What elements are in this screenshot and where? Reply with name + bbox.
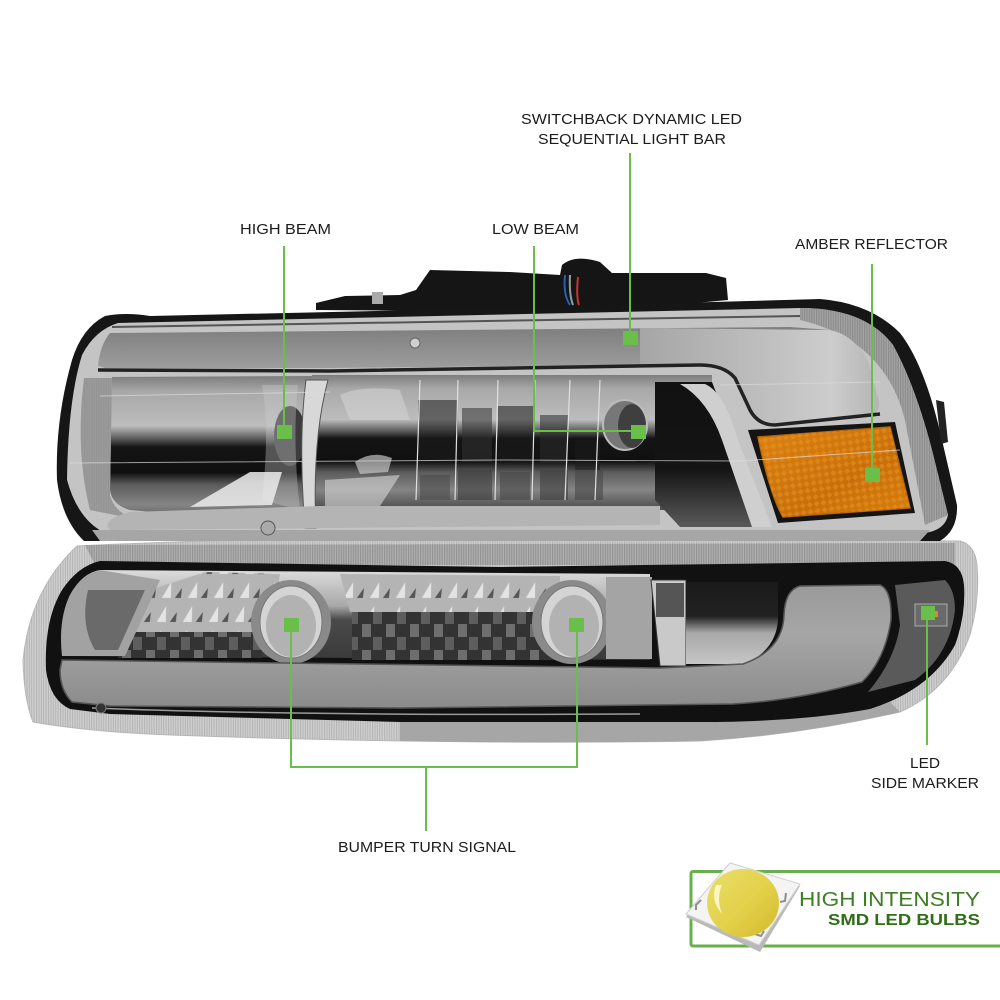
right dark wedge [655,382,768,527]
bumper black gasket [46,561,964,722]
chrome inner block [651,580,686,666]
grey panel beside right bulb [606,577,652,659]
left corner reflector [61,570,160,656]
bumper turn signal lamp [23,537,978,742]
facet lines [416,380,600,500]
chrome strip [680,384,772,527]
callout: bumper turn signal: BUMPER TURN SIGNAL [338,840,516,856]
bumper outer lens rim [23,537,978,742]
callout: low beam [492,222,646,439]
callout: bumper turn signal [284,618,584,856]
callout: switchback light bar: SWITCHBACK DYNAMIC LED [521,112,742,128]
bezel top dark stripe [112,316,800,327]
amber reflector [758,427,910,517]
sequential light bar swoosh [60,585,891,708]
callout: high beam [240,222,331,439]
bezel bottom chrome [92,530,930,541]
light bar screw [410,338,420,348]
lower chrome strip [108,506,660,530]
center reflector highlights [325,388,410,508]
bumper bulb right [532,580,612,664]
badge text line 2: SMD LED BULBS [828,912,980,929]
rear housing and wiring [316,259,728,312]
black surround of amber reflector [748,422,915,523]
callout: LED side marker: LED [910,756,940,772]
badge: high intensity SMD LED bulbs [686,863,1000,952]
right corner lens [868,580,955,692]
center reflector dark facets [418,400,603,500]
light bar dark edge [98,365,880,425]
high beam socket [190,385,306,510]
faceted reflector upper [130,572,560,634]
bumper top chrome strip [85,543,955,565]
bumper lower rim shade [400,702,900,742]
callout: switchback light bar [521,112,742,345]
lens lower screw [261,521,275,535]
headlight black outer frame [57,299,957,541]
chrome bezel [67,308,948,533]
badge frame [691,872,1000,946]
callout: LED side marker: SIDE MARKER [871,776,979,792]
badge text line 1: HIGH INTENSITY [799,889,980,911]
chrome divider [302,380,328,528]
bumper bulb left [251,580,331,664]
faceted reflector lower [118,612,555,660]
callout: amber reflector: AMBER REFLECTOR [795,237,948,253]
low beam socket [603,400,647,450]
side marker housing [915,604,947,626]
bumper clear lens [61,570,650,660]
light bar [98,327,879,424]
bumper screw [96,703,106,713]
callout: high beam: HIGH BEAM [240,222,331,238]
black recess [686,582,778,664]
main headlight [57,299,957,541]
callout: amber reflector [795,237,948,482]
left lens reflector [100,376,320,527]
callout: switchback light bar: SEQUENTIAL LIGHT BAR [538,132,726,148]
right side clip [936,400,948,444]
icon: LED chip [686,863,800,952]
center lens reflector [312,375,712,510]
callout: low beam: LOW BEAM [492,222,579,238]
callout: LED side marker [871,606,979,792]
